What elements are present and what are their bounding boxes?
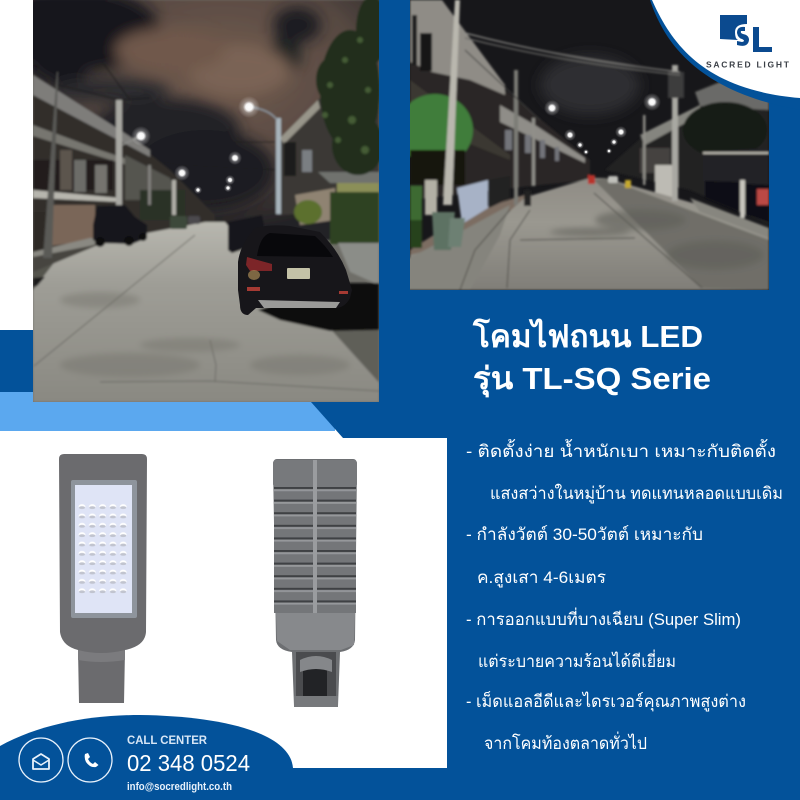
parked black car — [238, 225, 352, 315]
phone number: 02 348 0524 — [127, 750, 250, 776]
photo: street at night with parked cars — [33, 0, 379, 402]
gate right — [710, 149, 754, 183]
feature 3: - การออกแบบที่บางเฉียบ (Super Slim) — [466, 607, 741, 629]
feature 1: แสงสว่างในหมู่บ้าน ทดแทนหลอดแบบเดิม — [490, 483, 783, 504]
street lamp glows — [131, 96, 260, 194]
poles — [443, 0, 460, 205]
feature 3: แต่ระบายความร้อนได้ดีเยี่ยม — [478, 649, 676, 671]
road — [410, 178, 769, 290]
feature 1: - ติดตั้งง่าย น้ำหนักเบา เหมาะกับติดตั้ง — [466, 439, 776, 461]
logo mark — [720, 15, 772, 52]
sidewalk — [33, 237, 98, 258]
footer contact badge — [0, 715, 293, 800]
brand name: SACRED LIGHT — [706, 60, 790, 70]
photo: village road at night — [397, 0, 769, 290]
right wall and dark lane — [338, 243, 379, 285]
feature 3 — [466, 607, 741, 671]
right buildings — [607, 108, 769, 224]
feature 2: - กำลังวัตต์ 30-50วัตต์ เหมาะกับ — [466, 525, 703, 544]
title — [472, 318, 711, 398]
feature 4: จากโคมท้องตลาดทั่วไป — [484, 731, 647, 753]
tree — [315, 0, 379, 176]
product: LED street lamp front — [59, 454, 147, 703]
wires — [104, 68, 274, 144]
icon: telephone — [68, 738, 112, 782]
wires — [465, 33, 680, 72]
feature 4 — [466, 690, 746, 753]
logo corner panel — [650, 0, 800, 110]
left SUV — [93, 205, 147, 244]
feature 2: ค.สูงเสา 4-6เมตร — [477, 568, 606, 588]
feature 4: - เม็ดแอลอีดีและไดรเวอร์คุณภาพสูงต่าง — [466, 690, 746, 712]
left buildings — [410, 62, 591, 200]
street lamp glows — [544, 93, 661, 155]
feature 1 — [466, 439, 783, 504]
title: โคมไฟถนน LED — [472, 318, 703, 354]
shadow — [258, 283, 379, 331]
icon: envelope — [19, 738, 63, 782]
distant cars — [170, 216, 187, 229]
product: LED street lamp back — [273, 459, 357, 707]
feature list — [466, 439, 783, 753]
call center label: CALL CENTER — [127, 733, 207, 747]
feature 2 — [466, 525, 703, 588]
gate — [457, 180, 488, 224]
left row of houses — [33, 103, 214, 248]
hedge and tree — [410, 92, 474, 158]
title: รุ่น TL-SQ Serie — [473, 361, 711, 398]
road — [33, 222, 379, 402]
right houses — [278, 98, 379, 215]
email: info@socredlight.co.th — [127, 781, 232, 793]
far vehicles — [588, 175, 595, 184]
poles and lamps — [43, 72, 58, 258]
bins — [432, 212, 455, 250]
